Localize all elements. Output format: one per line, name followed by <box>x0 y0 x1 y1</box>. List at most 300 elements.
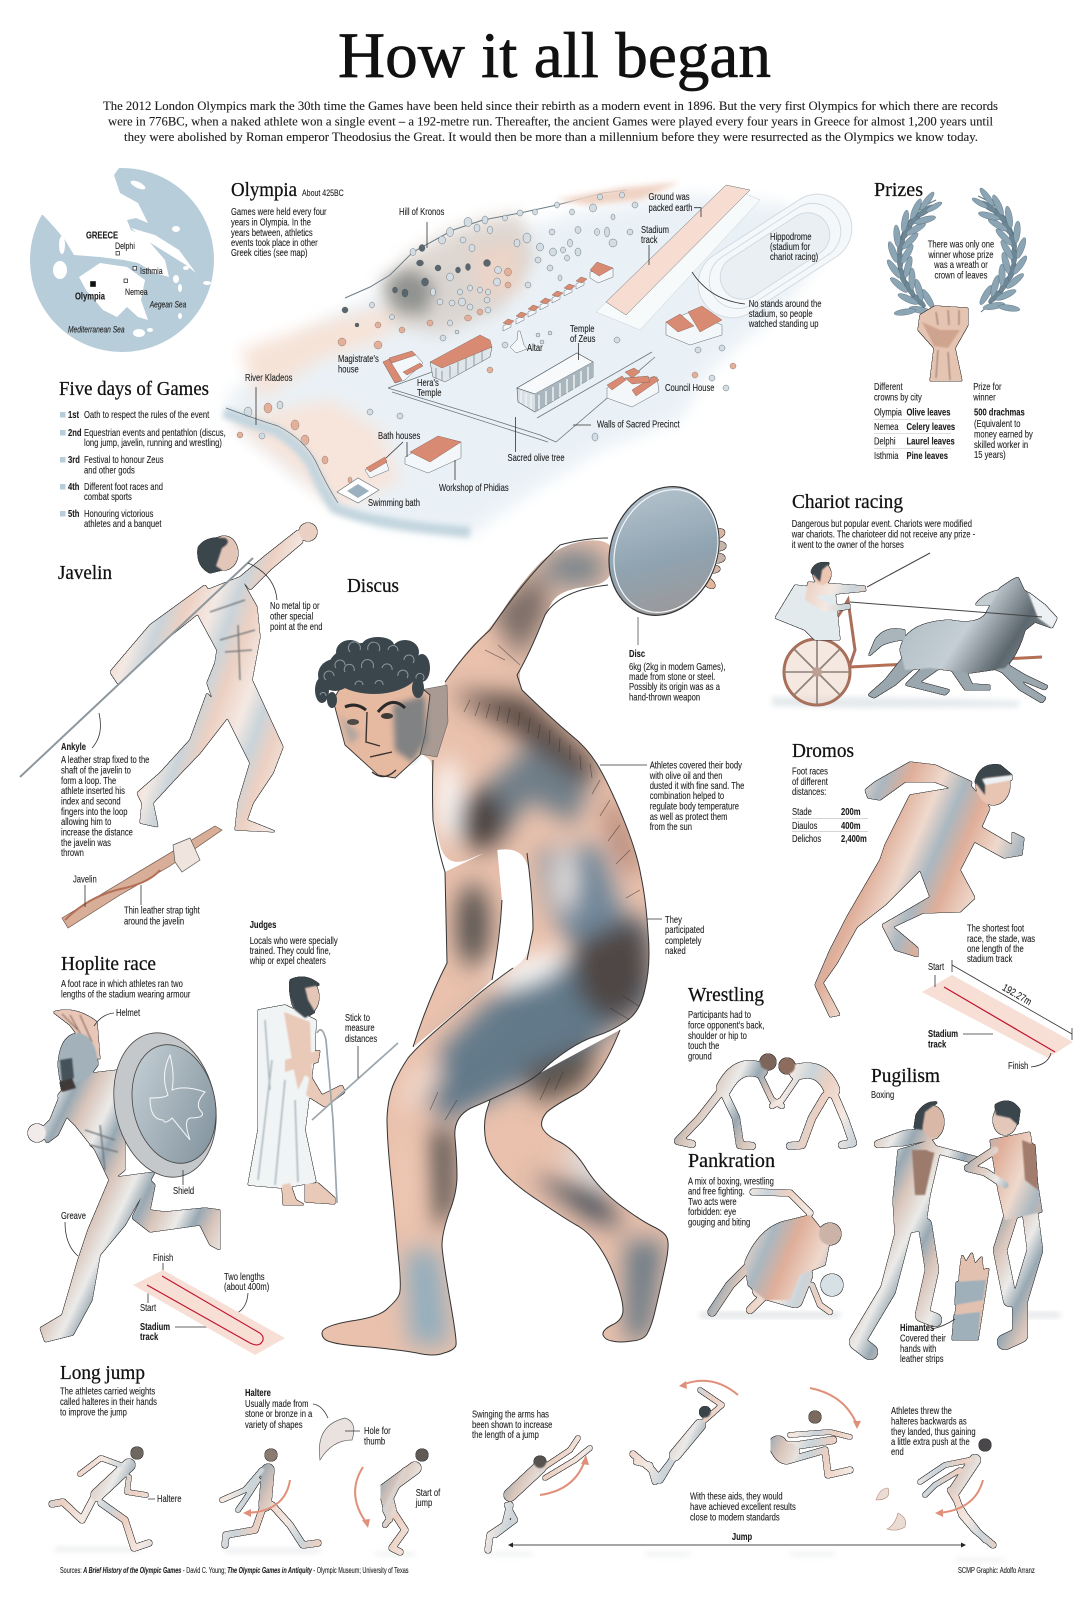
runner 3 <box>385 1449 428 1552</box>
shield <box>101 1023 229 1187</box>
hoplite leaders <box>65 1013 248 1327</box>
judges text: whip or expel cheaters <box>249 955 326 966</box>
day list: athletes and a banquet <box>84 518 162 529</box>
pankration text: forbidden: eye <box>688 1206 736 1217</box>
panel: Olympia site illustration <box>224 180 865 535</box>
disc rim <box>596 474 736 628</box>
prize for winner <box>972 381 1033 460</box>
stick leader <box>357 1046 359 1078</box>
site labels: chariot racing) <box>770 251 818 262</box>
site labels: Hera's <box>417 377 439 388</box>
Temple of Zeus <box>517 353 593 412</box>
detail labels: Javelin <box>73 873 97 885</box>
left branch <box>885 190 943 317</box>
distance table: Delichos <box>792 833 822 844</box>
day list: Honouring victorious <box>84 508 154 519</box>
javelin athlete <box>110 523 317 832</box>
stade track diagram <box>922 960 1073 1067</box>
oil note: regulate body temperature <box>650 800 739 812</box>
charioteer <box>775 562 866 640</box>
site labels: Hill of Kronos <box>399 206 445 217</box>
ground <box>700 1312 840 1318</box>
site labels: Council House <box>665 382 715 393</box>
head <box>333 670 430 778</box>
detail labels <box>73 873 200 927</box>
small labels: Athletes threw the <box>891 1405 952 1416</box>
right boxer <box>968 1101 1042 1342</box>
day markers <box>60 412 66 516</box>
site labels: Workshop of Phidias <box>439 482 509 493</box>
prize for winner: (Equivalent to <box>974 418 1021 429</box>
small labels <box>157 1405 976 1523</box>
hoplite labels: Helmet <box>116 1007 141 1018</box>
stade labels: track <box>928 1038 947 1050</box>
site labels: packed earth <box>649 202 693 213</box>
small labels: thumb <box>364 1435 385 1447</box>
pole and reins <box>850 657 1042 667</box>
disc note: hand-thrown weapon <box>629 691 700 703</box>
chariot text: it went to the owner of the horses <box>792 539 904 550</box>
arrowheads <box>243 1381 943 1528</box>
haltere note: stone or bronze in a <box>245 1408 313 1419</box>
site labels: Stadium <box>641 224 669 235</box>
wrestling text: touch the <box>688 1040 719 1051</box>
small labels: they landed, thus gaining <box>891 1426 976 1437</box>
jumper 5 <box>633 1390 722 1482</box>
site labels: Ground was <box>649 191 690 202</box>
haltere note: variety of shapes <box>245 1419 303 1430</box>
swimming bath <box>337 478 379 503</box>
watercolour ground wash <box>225 195 820 535</box>
oil leader <box>600 765 662 919</box>
oil note: combination helped to <box>650 790 724 801</box>
boxing label: Boxing <box>871 1089 894 1100</box>
small labels: Start of <box>416 1487 441 1498</box>
map land <box>15 150 211 337</box>
prize for winner: winner <box>972 391 996 403</box>
chariot text: war chariots. The charioteer did not receive any prize - <box>791 528 975 540</box>
Olympia text: years in Olympia. In the <box>231 216 311 228</box>
heading: Pugilism <box>871 1066 940 1087</box>
hoplite track diagram <box>133 1270 285 1355</box>
dromos text: Foot races <box>792 765 828 777</box>
disc note: Disc <box>629 648 645 659</box>
map labels: Isthmia <box>140 265 163 276</box>
disc <box>590 470 738 632</box>
wrapped hand <box>952 1252 989 1340</box>
Magistrate's house <box>383 351 423 383</box>
tip note: No metal tip or <box>270 600 319 611</box>
heading: Chariot racing <box>792 492 903 513</box>
panel: pankration <box>688 1151 843 1318</box>
hoplite labels: (about 400m) <box>224 1281 269 1292</box>
hoplite labels: Two lengths <box>224 1271 265 1282</box>
curly hair <box>315 637 430 708</box>
ankyle note: allowing him to <box>61 816 111 827</box>
judges text: Judges <box>250 919 276 930</box>
dromos text: of different <box>792 776 828 787</box>
hoplite labels <box>61 1007 269 1342</box>
body base <box>322 540 668 1354</box>
motion arrows <box>245 1381 983 1525</box>
wreath text: was a wreath or <box>933 259 988 270</box>
site labels: stadium, so people <box>749 308 813 319</box>
intro text: were in 776BC, when a naked athlete won a single event – a 192-metre run. Thereafter, the ancient Games were played every four years in Greece for almost 1,200 years until <box>108 114 993 128</box>
chariot wheel <box>784 639 850 705</box>
site labels: (stadium for <box>770 241 810 252</box>
site labels: Temple <box>570 323 595 334</box>
site labels: Magistrate's <box>338 353 379 364</box>
day list: and other gods <box>84 464 135 476</box>
long jump text: called halteres in their hands <box>60 1396 157 1407</box>
wreath text: crown of leaves <box>935 269 988 281</box>
haltere leaders <box>148 1404 360 1499</box>
haltere note: Haltere <box>245 1387 271 1398</box>
site labels: house <box>338 363 359 375</box>
oil note: from the sun <box>650 821 692 832</box>
disc note: 6kg (2kg in modern Games), <box>629 661 725 672</box>
blue trees lower <box>244 331 729 441</box>
panel: prizes <box>874 180 1033 461</box>
right branch <box>971 186 1029 313</box>
oil note: dusted it with fine sand. The <box>650 780 744 791</box>
site labels: No stands around the <box>749 298 821 309</box>
ankyle note: index and second <box>61 795 121 807</box>
prize for winner: 500 drachmas <box>974 406 1025 418</box>
stade labels: Start <box>928 961 944 972</box>
date label: About 425BC <box>302 187 344 198</box>
distance table: Diaulos <box>792 820 818 831</box>
panel: long jump <box>52 1363 1005 1561</box>
haltere weight <box>319 1418 354 1460</box>
Hera's Temple <box>430 335 492 382</box>
crowns table: Celery leaves <box>907 421 955 432</box>
panel: javelin <box>20 523 322 928</box>
hoplite labels: Start <box>140 1302 156 1313</box>
wrestling text: shoulder or hip to <box>688 1030 747 1041</box>
hoplite labels: Stadium <box>140 1321 170 1332</box>
day list <box>68 409 226 529</box>
crowns table: Pine leaves <box>907 450 948 461</box>
reins <box>850 602 1042 617</box>
prize for winner: money earned by <box>974 428 1033 440</box>
heading: Wrestling <box>688 985 764 1006</box>
himantes leader <box>932 1319 955 1329</box>
long jump text: The athletes carried weights <box>60 1385 156 1397</box>
ankyle note: Ankyle <box>61 741 86 752</box>
hand and strap detail <box>62 826 222 928</box>
ankyle note: fingers into the loop <box>61 806 127 817</box>
body outline <box>322 538 668 1355</box>
day list: 2nd <box>68 427 82 438</box>
building by stadium <box>666 306 722 345</box>
site labels: watched standing up <box>748 318 819 329</box>
panel: map of Greece <box>15 150 214 352</box>
heading: Hoplite race <box>61 954 156 975</box>
dromos text: distances: <box>792 786 826 797</box>
site labels: Sacred olive tree <box>507 452 565 463</box>
prize for winner: 15 years) <box>974 449 1006 460</box>
hoplite labels: track <box>140 1331 159 1342</box>
site labels: Swimming bath <box>368 497 420 508</box>
stade note: one length of the <box>967 943 1024 954</box>
site labels: Hippodrome <box>770 231 811 242</box>
wreath text: There was only one <box>928 238 994 250</box>
detail labels: around the javelin <box>124 915 184 927</box>
crowns table: Delphi <box>874 435 896 447</box>
map labels: Mediterranean Sea <box>68 325 125 335</box>
crowns table: Olympia <box>874 406 903 418</box>
stadium track <box>596 185 760 330</box>
wrestlers <box>678 1054 853 1146</box>
distance table: 200m <box>841 806 860 817</box>
ankyle note: athlete inserted his <box>61 785 125 796</box>
hoplite figure <box>28 1010 220 1342</box>
wrestling text: Participants had to <box>688 1009 751 1020</box>
intro text: The 2012 London Olympics mark the 30th time the Games have been held since their rebirth as a modern event in 1896. But the very first Olympics for which there are records <box>103 98 998 113</box>
long jump text: to improve the jump <box>60 1406 127 1418</box>
day list: Festival to honour Zeus <box>84 454 164 465</box>
heading: Discus <box>347 576 399 597</box>
naked note: naked <box>665 945 686 956</box>
distance table <box>792 806 868 844</box>
wrestling text: force opponent's back, <box>688 1019 764 1031</box>
naked note: participated <box>665 924 704 935</box>
small labels: Haltere <box>157 1493 182 1504</box>
day list: 5th <box>68 508 79 519</box>
Olympia text: Games were held every four <box>231 206 327 217</box>
heading: Javelin <box>58 563 112 584</box>
intro text: they were abolished by Roman emperor Theodosius the Great. It would then be more than a millennium before they were resurrected as the Olympics we know today. <box>124 129 978 144</box>
detail labels: Thin leather strap tight <box>124 904 200 916</box>
panel: hoplite race <box>28 954 285 1355</box>
pankration text: Two acts were <box>688 1196 737 1207</box>
chariot body <box>825 600 855 665</box>
himantes note: Covered their <box>900 1332 946 1344</box>
stick label: Stick to <box>345 1012 370 1023</box>
site labels: track <box>641 234 658 245</box>
day list: Equestrian events and pentathlon (discus, <box>84 427 226 438</box>
Altar <box>510 331 527 353</box>
river Kladeos <box>224 408 470 532</box>
day list: 3rd <box>68 454 80 465</box>
title: How it all began <box>338 20 771 92</box>
map labels: Nemea <box>125 286 148 297</box>
pink trees <box>237 268 736 483</box>
small labels: a little extra push at the <box>891 1436 970 1447</box>
ankyle note: increase the distance <box>61 826 133 838</box>
stade note: The shortest foot <box>967 922 1025 934</box>
jump label: Jump <box>732 1531 753 1542</box>
stade note: stadium track <box>967 953 1013 964</box>
site labels: Bath houses <box>378 430 421 441</box>
Olympia text: Greek cities (see map) <box>231 247 308 258</box>
stade note: race, the stade, was <box>967 933 1036 944</box>
heading: Prizes <box>874 180 923 201</box>
Olympia text: years between, athletics <box>231 227 313 238</box>
map labels <box>68 229 187 335</box>
bath houses <box>365 436 461 478</box>
distance table: 400m <box>841 820 860 831</box>
hoplite text: A foot race in which athletes ran two <box>61 978 183 989</box>
oil note: Athletes covered their body <box>650 759 742 771</box>
panel: pugilism <box>857 1066 1060 1364</box>
disc note: Possibly its origin was as a <box>629 681 721 692</box>
crowns table: Different <box>874 381 903 392</box>
wreath text: winner whose prize <box>928 249 994 260</box>
ankyle note: form a loop. The <box>61 775 116 786</box>
jumper 4 <box>488 1438 590 1550</box>
fingers on disc <box>701 527 726 591</box>
site labels: Temple <box>417 387 442 398</box>
site labels: Altar <box>527 342 543 353</box>
site leader lines <box>256 208 745 480</box>
runner 2 <box>222 1449 318 1545</box>
oil note: with olive oil and then <box>649 770 722 781</box>
himantes note: Himantes <box>900 1322 934 1333</box>
neck <box>420 685 448 757</box>
naked note: They <box>665 914 682 925</box>
crowns table: Laurel leaves <box>907 435 955 447</box>
measuring stick and staff <box>312 1030 398 1203</box>
map labels: Delphi <box>115 240 135 251</box>
himantes note: leather strips <box>900 1353 944 1364</box>
back hatching <box>430 645 645 1120</box>
ankyle note: thrown <box>61 847 84 858</box>
judges text: Locals who were specially <box>250 935 338 946</box>
stade labels: Stadium <box>928 1028 958 1039</box>
crowns table: Isthmia <box>874 450 899 461</box>
ground shadows <box>55 1548 1005 1561</box>
stick label: measure <box>345 1022 375 1033</box>
small labels: been shown to increase <box>472 1419 552 1430</box>
stade labels <box>928 961 1034 1071</box>
heading: Long jump <box>60 1363 145 1384</box>
javelin shaft <box>20 558 253 777</box>
small labels: Hole for <box>364 1425 391 1436</box>
discus thrower figure <box>300 470 738 1370</box>
distance table: Stade <box>792 806 812 817</box>
site labels: of Zeus <box>570 333 596 344</box>
stade labels: Finish <box>1008 1060 1028 1071</box>
credit: SCMP Graphic: Adolfo Arranz <box>958 1567 1035 1575</box>
stick label: distances <box>345 1033 378 1044</box>
stade labels: 192.27m <box>1000 982 1034 1008</box>
day list: Oath to respect the rules of the event <box>84 409 210 420</box>
crowns table: Olive leaves <box>907 406 951 418</box>
small labels: have achieved excellent results <box>690 1501 796 1512</box>
map sea circle <box>30 168 214 352</box>
ground wash <box>772 697 1020 708</box>
himantes note: hands with <box>900 1343 936 1354</box>
panel: discus <box>300 470 744 1370</box>
heading: Pankration <box>688 1151 775 1172</box>
haltere note: Usually made from <box>245 1398 308 1409</box>
ground shadow <box>1020 1312 1060 1318</box>
panel: wrestling <box>678 985 853 1146</box>
tip note: point at the end <box>270 621 322 632</box>
javelin leaders <box>92 563 277 748</box>
hoplite labels: Finish <box>153 1252 173 1263</box>
jumper 7 <box>920 1439 993 1545</box>
site labels: Walls of Sacred Precinct <box>597 418 680 430</box>
prize for winner: Prize for <box>973 381 1002 392</box>
runner <box>815 762 1024 1017</box>
Olympia text: events took place in other <box>231 237 318 248</box>
site labels: River Kladeos <box>245 372 293 383</box>
judge figure <box>248 977 345 1205</box>
day list: 1st <box>68 409 79 420</box>
panel: five days of Games <box>59 379 226 529</box>
small labels: Swinging the arms has <box>472 1408 549 1420</box>
panel: judges <box>248 919 398 1205</box>
ankyle note: shaft of the javelin to <box>61 764 131 776</box>
ankyle note: the javelin was <box>61 837 111 848</box>
trees on hill <box>370 192 638 341</box>
judges text: trained. They could fine, <box>250 945 331 956</box>
pankration text: and free fighting. <box>688 1185 745 1197</box>
runner 1 <box>52 1447 149 1548</box>
small labels: jump <box>415 1497 432 1508</box>
map city markers <box>90 252 136 286</box>
jumper 6 <box>778 1411 850 1475</box>
Olympia heading: Olympia <box>231 180 297 201</box>
small labels: halteres backwards as <box>891 1415 967 1427</box>
dromos <box>792 741 1073 1071</box>
tip note: other special <box>270 610 313 622</box>
laurel wreath <box>885 186 1029 317</box>
map labels: Olympia <box>75 290 106 302</box>
disc leader <box>637 617 639 645</box>
pankration text: A mix of boxing, wrestling <box>688 1175 774 1187</box>
wrestling text: ground <box>688 1050 712 1062</box>
sources: Sources: A Brief History of the Olympic Games - David C. Young; The Olympic Games in Antiquity - Olympic Museum; University of Texas <box>60 1567 409 1575</box>
prize for winner: skilled worker in <box>974 439 1028 450</box>
hoplite labels: Shield <box>173 1185 194 1196</box>
small labels: the length of a jump <box>472 1429 539 1440</box>
hoplite text: lengths of the stadium wearing armour <box>61 988 190 1000</box>
oil note: as well as protect them <box>650 811 728 822</box>
small labels: close to modern standards <box>690 1511 780 1523</box>
thrown halteres <box>876 1488 906 1530</box>
hill of Kronos <box>345 182 680 335</box>
hippodrome <box>685 181 865 331</box>
small labels: end <box>891 1446 904 1457</box>
day list: Different foot races and <box>84 481 163 492</box>
chariot text: Dangerous but popular event. Chariots were modified <box>792 518 972 529</box>
fighters <box>712 1192 843 1312</box>
Council House <box>607 368 659 407</box>
heading: Five days of Games <box>59 379 209 400</box>
ankyle note: A leather strap fixed to the <box>61 754 149 765</box>
hoplite labels: Greave <box>61 1210 86 1221</box>
disc note: made from stone or steel. <box>629 671 715 682</box>
map labels: GREECE <box>86 229 118 241</box>
day list: 4th <box>68 481 79 492</box>
fist holding wreath <box>918 306 968 381</box>
naked note: completely <box>665 935 702 946</box>
day list: long jump, javelin, running and wrestling) <box>84 437 222 448</box>
distance table: 2,400m <box>841 833 867 844</box>
jump arrow <box>508 1542 966 1548</box>
crowns table: Nemea <box>874 421 899 432</box>
heading: Dromos <box>792 741 854 762</box>
precinct walls <box>388 352 655 442</box>
left boxer <box>857 1102 975 1352</box>
small labels: With these aids, they would <box>690 1490 783 1502</box>
dark trees <box>342 244 490 327</box>
map labels: Aegean Sea <box>149 300 187 310</box>
